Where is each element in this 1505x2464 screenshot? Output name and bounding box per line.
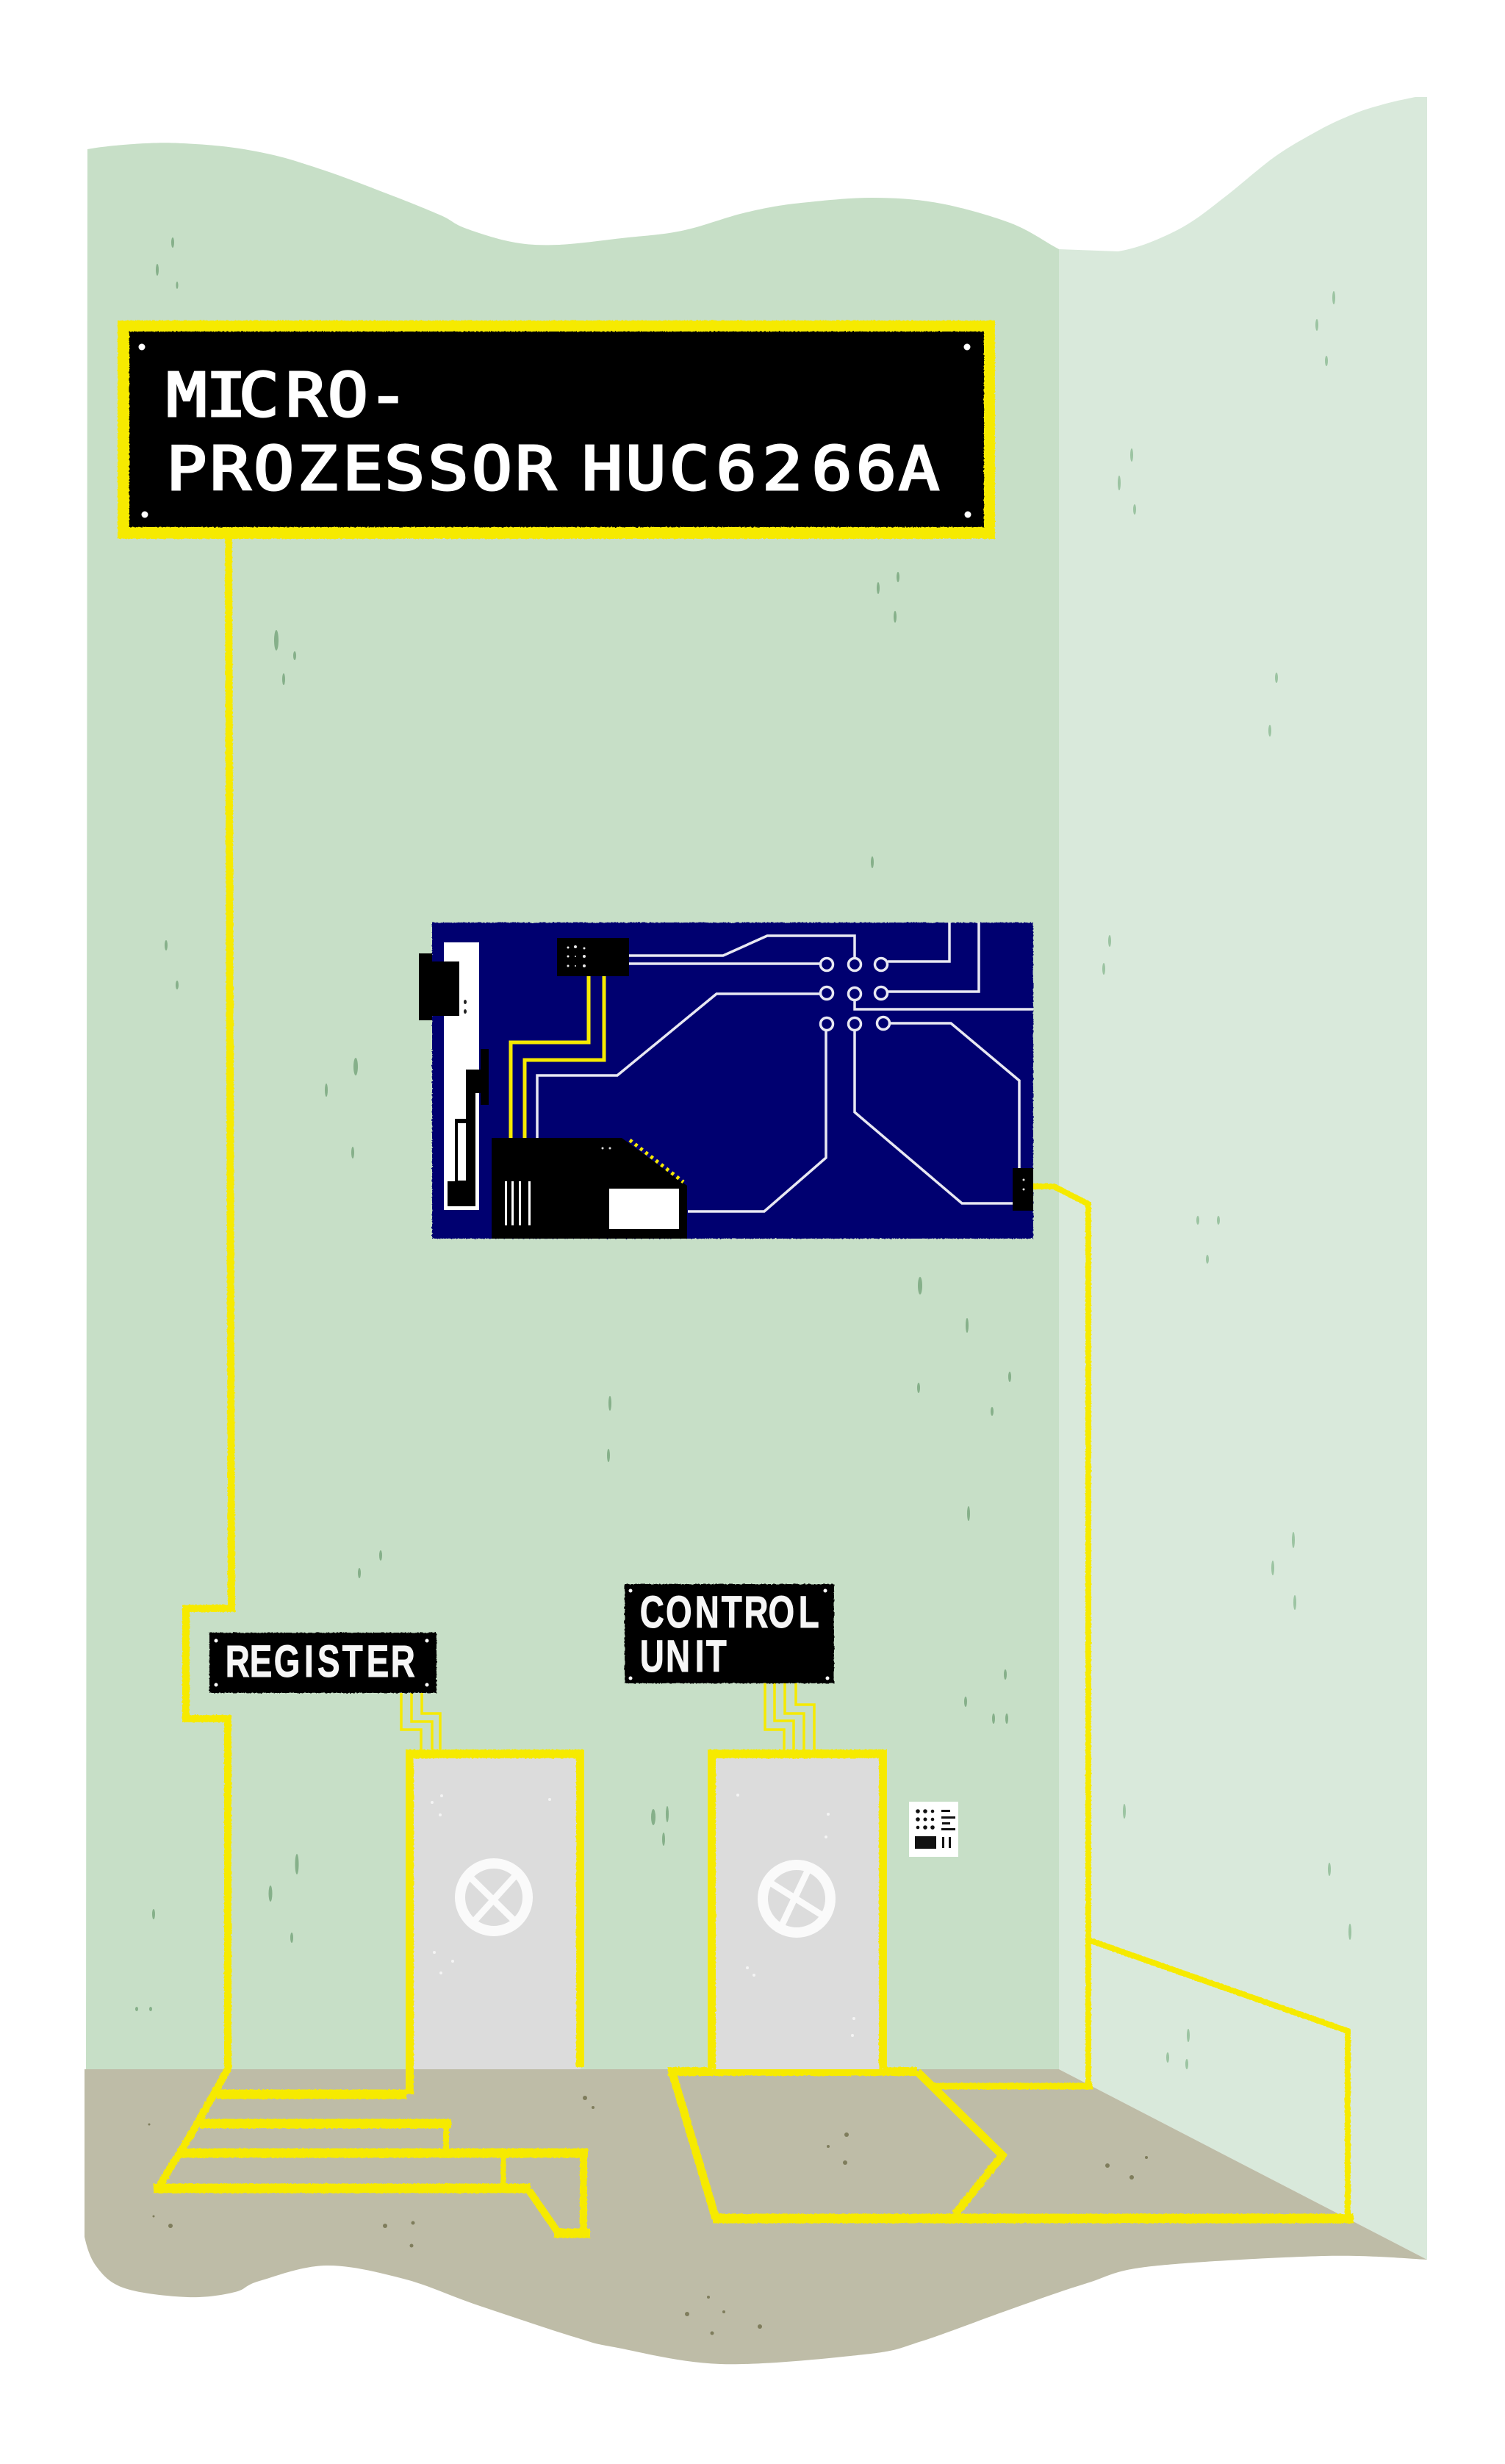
wall specks xyxy=(135,237,1011,2011)
door wheel xyxy=(460,1863,528,1931)
wire: from circuit board down the right wall xyxy=(1033,1186,1088,2088)
sign: control unit: UNIT xyxy=(640,1632,727,1682)
wire: branch on right wall xyxy=(1088,1940,1348,2216)
door body xyxy=(410,1754,581,2069)
board base xyxy=(432,923,1033,1239)
yellow traces xyxy=(511,976,604,1138)
sign plate xyxy=(129,332,984,527)
door rivets xyxy=(431,1794,551,1974)
thin wires: register sign to door xyxy=(401,1693,440,1749)
door frame xyxy=(711,1754,883,2069)
sign frame xyxy=(118,320,995,539)
floor pattern: register path xyxy=(154,2094,590,2235)
upper chip xyxy=(557,938,629,976)
thin wires: control unit sign to door xyxy=(765,1683,814,1749)
floor xyxy=(85,2069,1427,2364)
white traces xyxy=(537,923,1033,1211)
via circles xyxy=(820,959,889,1031)
floor pattern: control unit path xyxy=(668,2071,1354,2218)
title text: MICRO- xyxy=(166,360,409,431)
control unit label: CONTROL xyxy=(640,1588,819,1638)
door frame xyxy=(409,1754,581,2094)
door wheel xyxy=(763,1865,830,1933)
door rivets xyxy=(736,1794,855,2037)
sign: title xyxy=(118,320,995,539)
door: register xyxy=(409,1754,581,2094)
sign: title: PROZESSOR HUC6266A xyxy=(166,434,939,504)
register label: REGISTER xyxy=(226,1637,415,1687)
right connector chip xyxy=(1013,1168,1033,1211)
right wall xyxy=(1059,97,1427,2260)
sign: control unit xyxy=(625,1584,834,1683)
sign: register xyxy=(209,1633,437,1693)
door body xyxy=(711,1754,884,2069)
wire: main line from title sign to floor xyxy=(158,539,231,2188)
circuit board xyxy=(419,923,1033,1239)
white strip with connectors xyxy=(419,942,489,1210)
yellow floor and wall wiring xyxy=(154,539,1354,2235)
left wall xyxy=(86,143,1059,2073)
main chip xyxy=(492,1138,687,1239)
small chip card xyxy=(909,1802,958,1857)
door: control unit xyxy=(711,1754,884,2069)
floor specks xyxy=(148,2096,1148,2335)
